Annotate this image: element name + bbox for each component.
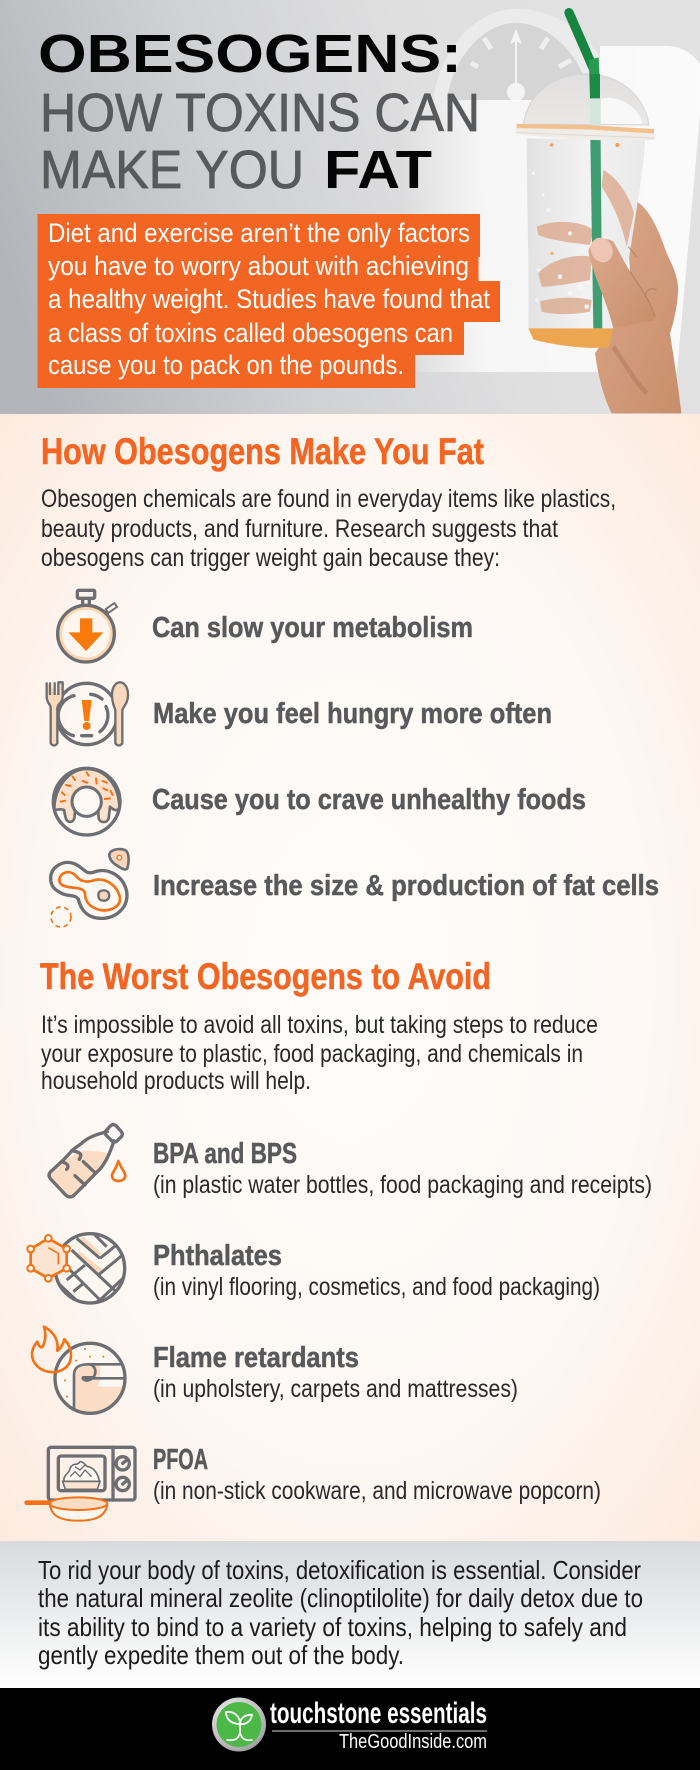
benefit: crave unhealthy foods: Cause you to crave unhealthy foods (152, 784, 586, 816)
panel: main content background (0, 414, 700, 1541)
intro text on orange highlight: a class of toxins called obesogens can (48, 318, 453, 348)
icon: plate with fork and spoon (47, 682, 128, 745)
paragraph: impossible to avoid: household products will help. (41, 1067, 311, 1095)
paragraph: impossible to avoid: your exposure to plastic, food packaging, and chemicals in (41, 1040, 583, 1068)
straw lower (589, 75, 602, 328)
intro text on orange highlight: cause you to pack on the pounds. (48, 350, 404, 380)
thumb over straw (588, 239, 655, 328)
paragraph: obesogen chemicals: beauty products, and furniture. Research suggests that (41, 515, 558, 543)
title: OBESOGENS: (38, 24, 462, 84)
title: HOW TOXINS CAN (40, 83, 480, 143)
icon: vinyl flooring and phthalate molecule (26, 1232, 126, 1305)
intro text on orange highlight (38, 214, 500, 388)
item: bpa and bps: BPA and BPS (153, 1138, 297, 1170)
heading: how obesogens make you fat: How Obesogens Make You Fat (41, 431, 484, 472)
droplets (532, 172, 589, 309)
intro text on orange highlight: you have to worry about with achieving (48, 251, 469, 281)
icon: donut (53, 768, 120, 835)
title: MAKE YOU (40, 140, 304, 200)
orange liquid (528, 328, 613, 348)
item: bpa and bps (153, 1138, 652, 1199)
hand behind cup (588, 201, 681, 413)
benefit: feel hungry: Make you feel hungry more often (153, 698, 552, 730)
paragraph: impossible to avoid: It’s impossible to avoid all toxins, but taking steps to reduce (41, 1011, 598, 1039)
panel: detox note (0, 1541, 700, 1688)
paragraph: impossible to avoid (41, 1011, 598, 1095)
icon: microwave popcorn and pan (27, 1447, 135, 1521)
panel: footer brand bar (0, 1688, 700, 1770)
item: flame retardants (153, 1342, 518, 1403)
icon: fat cells (51, 849, 129, 927)
icon: stopwatch with down arrow (58, 590, 117, 662)
fingers seen through the cup (537, 170, 634, 314)
panel: detox note: its ability to bind to a variety of toxins, helping to safely and (38, 1612, 627, 1642)
item: flame retardants: (in upholstery, carpets and mattresses) (153, 1375, 518, 1403)
logo: touchstone essentials (212, 1698, 266, 1752)
benefit: slow metabolism: Can slow your metabolism (152, 612, 473, 644)
illustration: bathroom scale backdrop (400, 9, 700, 372)
straw top (569, 13, 593, 68)
item: phthalates: (in vinyl flooring, cosmetics, and food packaging) (153, 1273, 600, 1301)
panel: header (0, 0, 700, 414)
intro text on orange highlight: Diet and exercise aren’t the only factors (48, 218, 470, 248)
cup body (527, 138, 645, 328)
item: pfoa (153, 1444, 601, 1505)
dome lid (523, 74, 649, 125)
intro text on orange highlight: a healthy weight. Studies have found that (48, 284, 490, 314)
item: pfoa: (in non-stick cookware, and microwave popcorn) (153, 1477, 601, 1505)
hand creases (613, 347, 647, 393)
item: pfoa: PFOA (153, 1444, 208, 1476)
illustration: hand holding plastic cup with straw (515, 13, 681, 413)
panel: detox note: gently expedite them out of the body. (38, 1640, 404, 1670)
icon: carpet roll and flame (32, 1327, 127, 1413)
item: phthalates: Phthalates (153, 1240, 282, 1272)
paragraph: obesogen chemicals: obesogens can trigger weight gain because they: (41, 544, 500, 572)
straw top in lid (589, 74, 600, 98)
title: FAT (324, 140, 432, 200)
website: TheGoodInside.com (339, 1731, 487, 1753)
heading: the worst obesogens to avoid: The Worst Obesogens to Avoid (40, 956, 491, 997)
rim (515, 123, 655, 141)
title (38, 24, 480, 200)
icon: plastic bottle with drop (49, 1125, 125, 1197)
brand name: touchstone essentials (270, 1697, 487, 1730)
paragraph: obesogen chemicals (41, 485, 616, 572)
item: flame retardants: Flame retardants (153, 1342, 359, 1374)
item: phthalates (153, 1240, 600, 1301)
